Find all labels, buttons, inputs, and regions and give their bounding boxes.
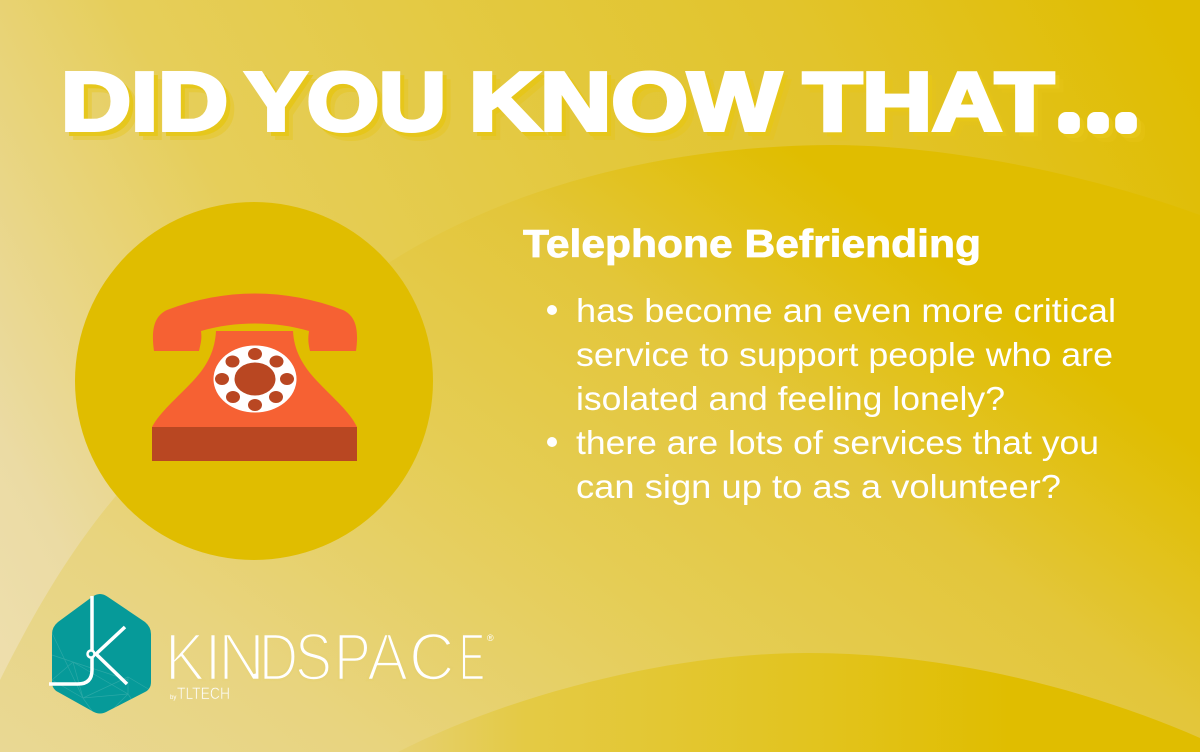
- rotary dial: [214, 346, 296, 412]
- title: YOU: [245, 55, 446, 148]
- telephone base: [152, 427, 357, 461]
- background wave: lower: [398, 653, 1200, 752]
- telephone handset: [153, 294, 357, 351]
- title: DID: [61, 55, 228, 148]
- logo wordmark: E: [459, 620, 485, 695]
- logo JK monogram: [49, 596, 127, 684]
- circle badge: [75, 202, 433, 560]
- logo wordmark: D: [259, 620, 298, 695]
- bullet 1: isolated and feeling lonely?: [576, 381, 1005, 418]
- title: THAT: [803, 55, 1054, 148]
- bullet 1: has become an even more critical: [576, 293, 1116, 330]
- logo: Kindspace by TLTECH: [49, 594, 494, 714]
- logo wordmark: A: [367, 620, 408, 695]
- bullet 1: [547, 293, 1116, 418]
- logo wordmark: K: [165, 620, 205, 695]
- telephone body: [152, 331, 357, 427]
- logo wordmark: N: [218, 620, 265, 695]
- title: KNOW: [469, 55, 782, 148]
- icon: telephone in circle: [75, 202, 433, 560]
- logo wordmark: P: [334, 620, 371, 695]
- logo byline brand: TLTECH: [177, 685, 230, 703]
- bullet list: [547, 293, 1116, 506]
- heading: Telephone Befriending: Telephone Befriending: [523, 223, 981, 266]
- bullet 2: can sign up to as a volunteer?: [576, 469, 1061, 506]
- bullet 1: service to support people who are: [576, 337, 1113, 374]
- logo wordmark: I: [205, 620, 221, 695]
- logo registered mark: ®: [487, 633, 494, 643]
- bullet 2: there are lots of services that you: [576, 425, 1099, 462]
- title: [61, 55, 1132, 148]
- logo network lines: [52, 633, 150, 714]
- bullet 2: [547, 425, 1099, 506]
- logo wordmark: C: [409, 620, 454, 695]
- title: ...: [1064, 91, 1132, 135]
- logo byline: by: [170, 695, 176, 701]
- logo hexagon: [52, 594, 151, 714]
- logo wordmark: S: [295, 620, 332, 695]
